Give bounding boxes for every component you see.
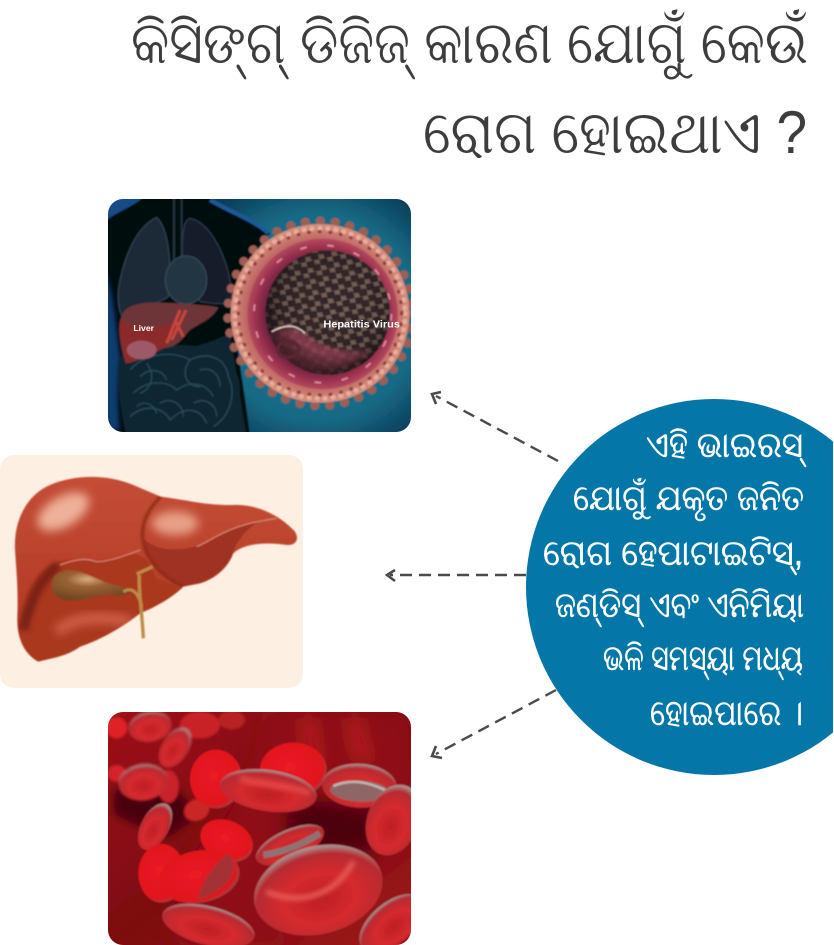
title [131,8,808,166]
liver in body [119,303,218,363]
body silhouette [103,195,270,437]
panel: liver illustration [0,455,303,688]
arrow: to blood cells image [432,690,556,758]
virus particle [228,221,412,406]
callout text: ଏହି ଭାଇରସ୍ [646,424,806,467]
panel: hepatitis virus image [103,195,417,437]
callout text [543,424,806,733]
callout text: ଯୋଗୁଁ ଯକୃତ ଜନିତ [573,477,804,521]
arrow: to liver image [387,570,526,581]
callout text: ହୋଇପାରେ । [650,692,803,733]
label: Hepatitis Virus: Hepatitis Virus [323,319,400,330]
liver organ [13,477,297,670]
callout text: ରୋଗ ହେପାଟାଇଟିସ୍, [543,532,803,575]
foreground cells [131,743,434,945]
background cell cluster [106,708,245,825]
callout circle [526,399,834,775]
panel: red blood cells image [103,708,434,945]
label: Liver: Liver [133,323,155,333]
title line 2: ରୋଗ ହୋଇଥାଏ ? [423,99,807,166]
arrow: to virus image [432,392,558,461]
gallbladder and ducts [52,567,153,638]
